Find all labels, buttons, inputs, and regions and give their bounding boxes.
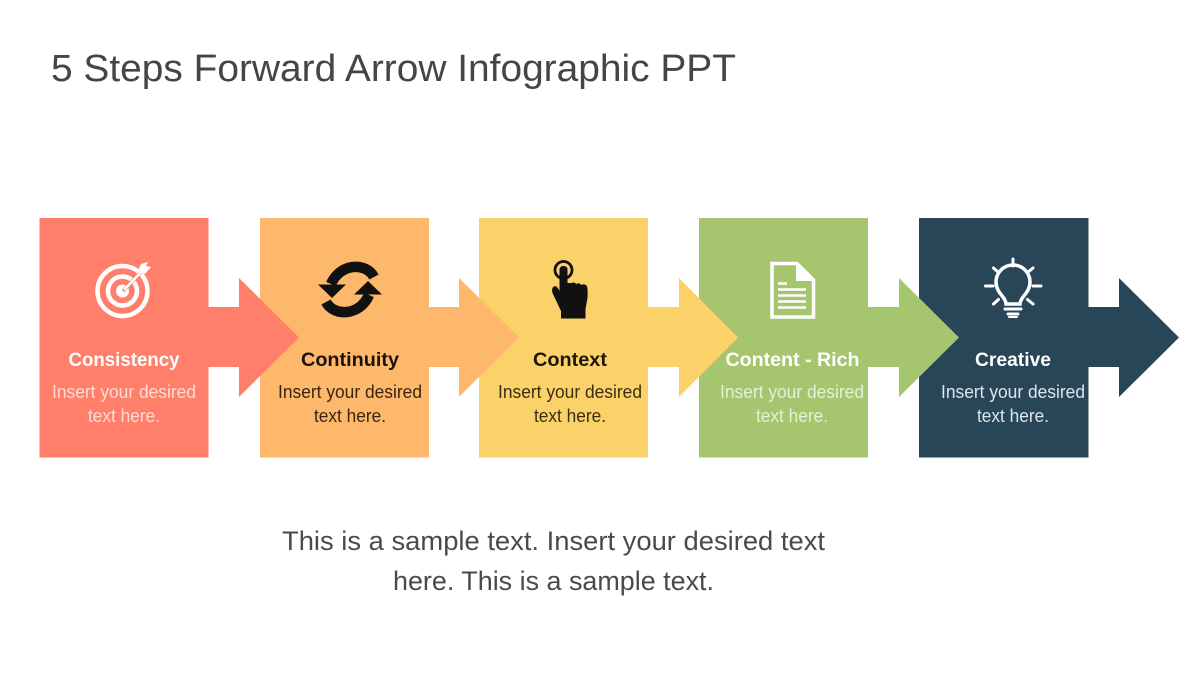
- text: Consistency: Consistency: [68, 350, 180, 371]
- text: Context: text here.: [534, 406, 606, 426]
- text: Creative: Insert your desired: [941, 382, 1085, 402]
- icon: light bulb: [986, 259, 1041, 317]
- text: Continuity: text here.: [314, 406, 386, 426]
- arrow: step 2 to step 3: [428, 278, 519, 397]
- text: Consistency: [52, 350, 196, 426]
- step 3 panel background: Context: [479, 218, 648, 458]
- text: Content - Rich: Insert your desired: [720, 382, 864, 402]
- step 4 panel background: Content - Rich: [699, 218, 868, 458]
- sample text block: This is a sample text. Insert your desired text: [282, 526, 826, 556]
- text: Continuity: Continuity: [301, 350, 399, 371]
- text: Consistency: Insert your desired: [52, 382, 196, 402]
- arrow: step 3 to step 4: [648, 278, 738, 397]
- arrow: step 5 outgoing: [1088, 278, 1179, 397]
- icon: document: [772, 263, 814, 317]
- text: Consistency: text here.: [88, 406, 160, 426]
- text: Context: Context: [533, 350, 608, 371]
- text: Continuity: [278, 350, 422, 426]
- title: 5 Steps Forward Arrow Infographic PPT: [51, 48, 736, 90]
- text: Content - Rich: [720, 350, 864, 426]
- icon: target with arrow: [98, 262, 151, 316]
- arrow: step 1 to step 2: [208, 278, 299, 397]
- step 1 panel background: Consistency: [40, 218, 208, 458]
- text: Continuity: Insert your desired: [278, 382, 422, 402]
- text: Content - Rich: text here.: [756, 406, 828, 426]
- icon: sync arrows: [318, 267, 382, 312]
- icon: pointing hand: [552, 262, 588, 318]
- sample text block: here. This is a sample text.: [393, 566, 714, 596]
- step 5 panel background: Creative: [919, 218, 1088, 458]
- sample text block: [282, 526, 826, 596]
- step 2 panel background: Continuity: [260, 218, 429, 458]
- arrow: step 4 to step 5: [868, 278, 959, 397]
- text: Creative: text here.: [977, 406, 1049, 426]
- text: Content - Rich: Content - Rich: [726, 350, 860, 371]
- text: Creative: [941, 350, 1085, 426]
- text: Creative: Creative: [975, 350, 1051, 371]
- text: Context: Insert your desired: [498, 382, 642, 402]
- text: Context: [498, 350, 642, 426]
